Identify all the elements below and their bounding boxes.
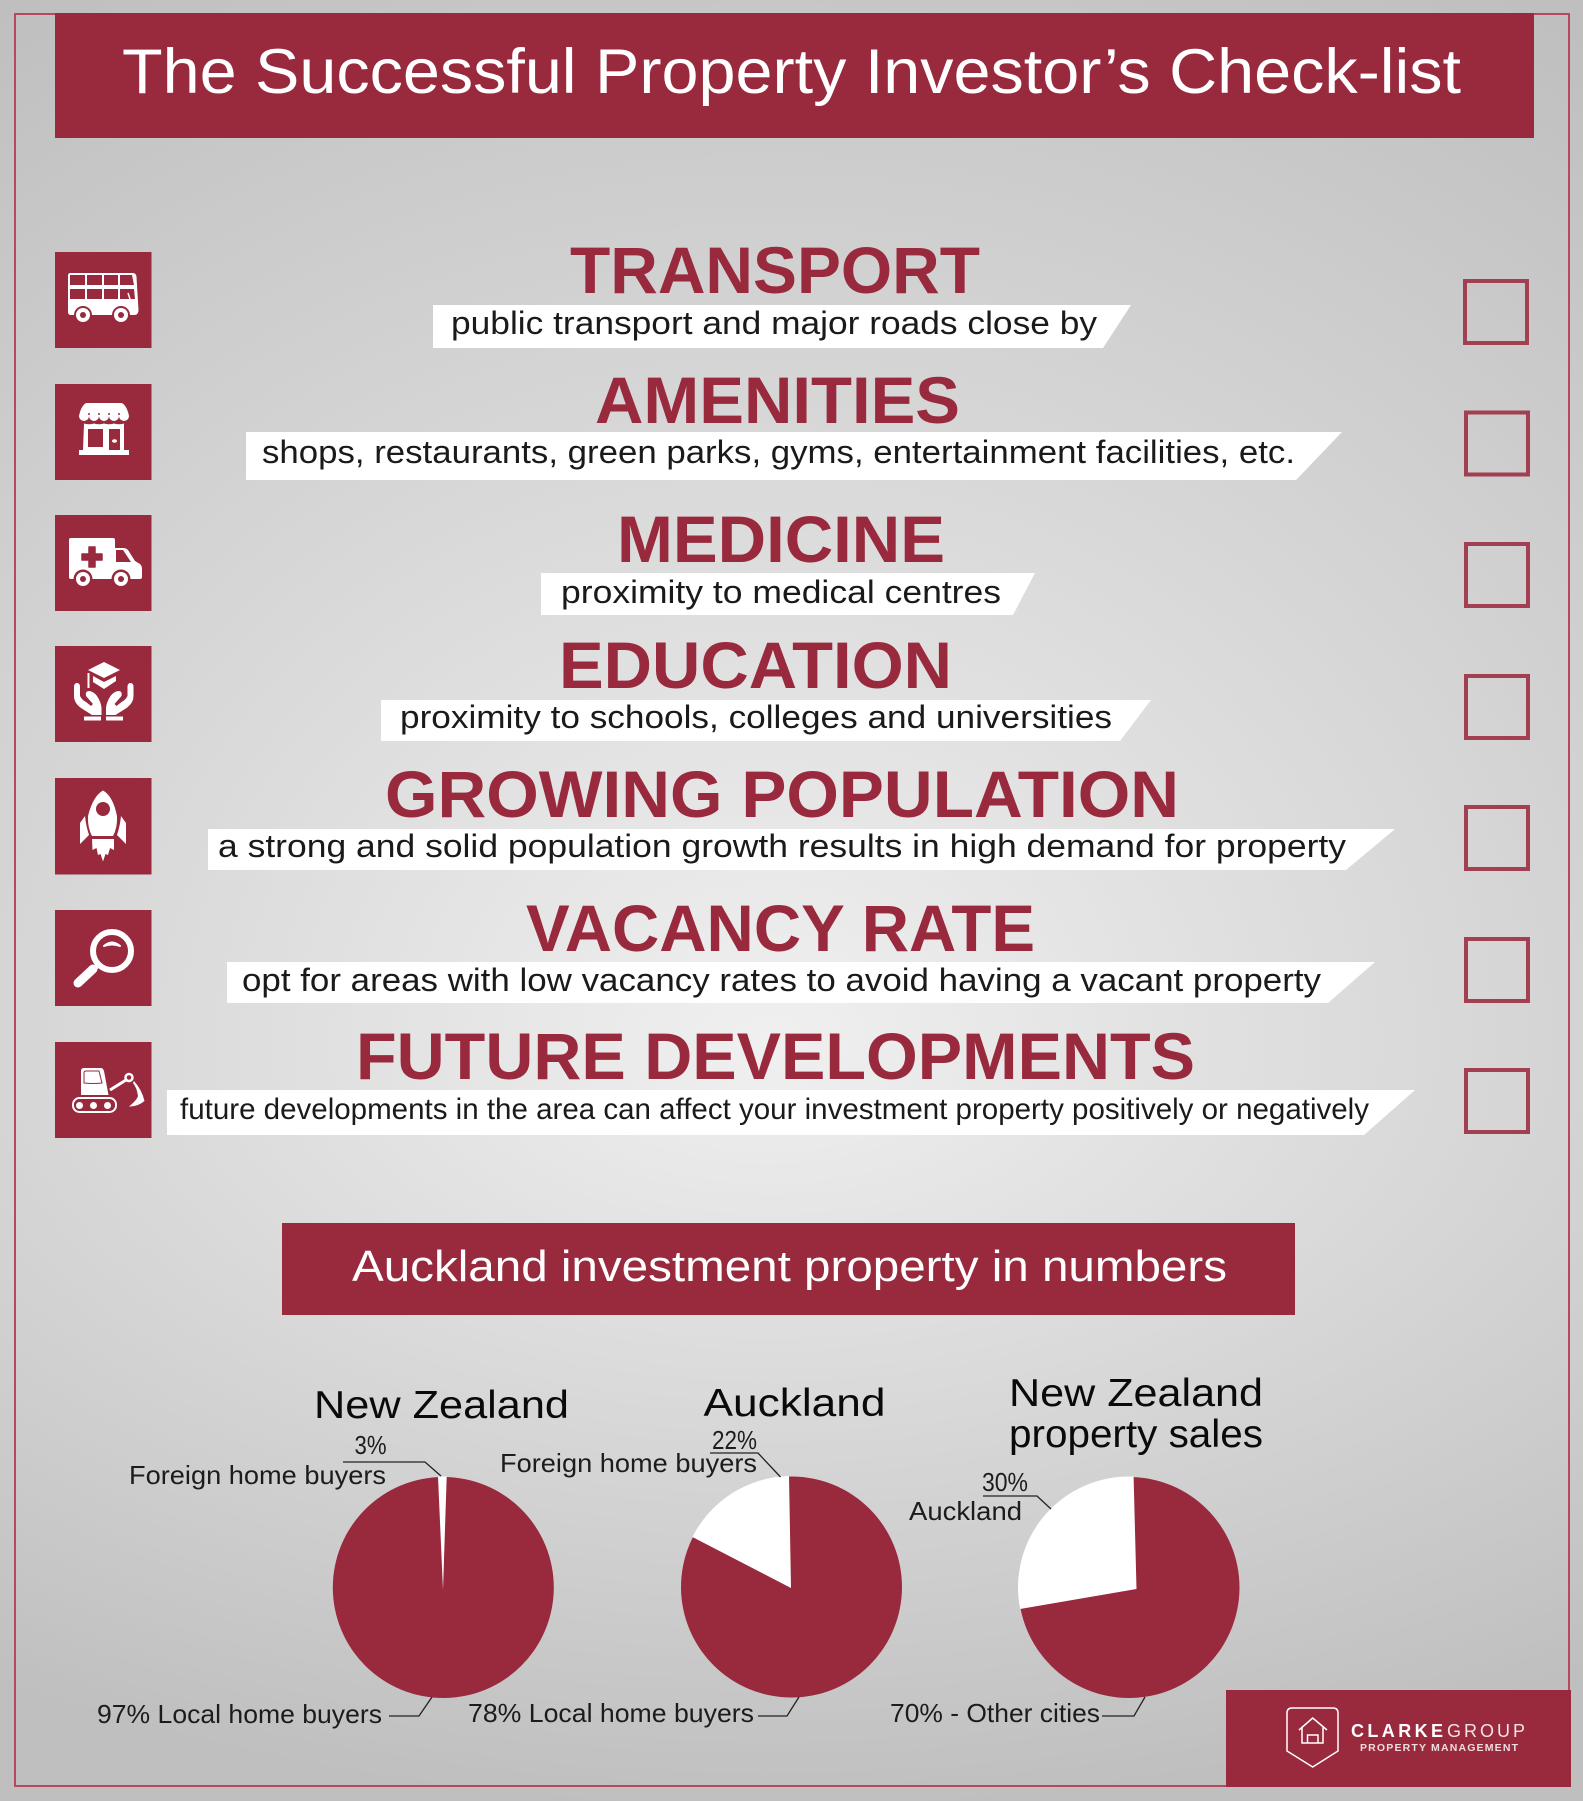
heading: EDUCATION <box>559 628 952 702</box>
logo wordmark: CLARKE <box>1351 1721 1443 1741</box>
heading: GROWING POPULATION <box>385 757 1179 831</box>
icon: magnifier <box>55 910 152 1006</box>
logo tagline: PROPERTY MANAGEMENT <box>1360 1742 1519 1754</box>
description: public transport and major roads close by <box>451 305 1097 341</box>
leader line <box>758 1697 799 1716</box>
icon: hands holding graduation cap <box>55 646 152 742</box>
label: local buyers: 78% Local home buyers <box>468 1698 754 1728</box>
description: a strong and solid population growth results in high demand for property <box>218 828 1346 864</box>
leader line <box>389 1697 432 1716</box>
row: growing population <box>55 757 1528 874</box>
leader line <box>983 1496 1051 1509</box>
leader line <box>1102 1697 1145 1716</box>
ribbon <box>433 305 1131 348</box>
label: 22 percent: 22% <box>712 1425 757 1455</box>
description: proximity to schools, colleges and universities <box>400 699 1112 735</box>
checkbox <box>1466 807 1528 869</box>
icon: shop <box>55 384 152 480</box>
ribbon <box>167 1090 1415 1135</box>
section banner <box>282 1223 1295 1315</box>
chart: New Zealand property sales pie <box>890 1372 1263 1728</box>
icon: bus <box>55 252 152 348</box>
checkbox <box>1466 1070 1528 1132</box>
row: transport <box>55 233 1527 348</box>
chart: New Zealand foreign buyers pie <box>97 1384 569 1729</box>
label: Auckland: Auckland <box>909 1496 1022 1526</box>
ribbon <box>381 700 1151 741</box>
heading: VACANCY RATE <box>526 891 1035 965</box>
checkbox <box>1465 281 1527 343</box>
label: 3 percent: 3% <box>354 1430 386 1460</box>
logo wordmark second part: GROUP <box>1447 1721 1525 1741</box>
row: amenities <box>55 363 1528 480</box>
logo panel <box>1226 1690 1571 1787</box>
leader line <box>710 1453 780 1477</box>
pie <box>333 1477 554 1698</box>
description: proximity to medical centres <box>561 574 1001 610</box>
checkbox <box>1466 412 1528 474</box>
row: future developments <box>55 1019 1528 1138</box>
chart title second line: property sales <box>1009 1413 1263 1456</box>
logo icon: house shield <box>1287 1708 1338 1767</box>
icon: ambulance <box>55 515 152 611</box>
checkbox <box>1466 939 1528 1001</box>
ribbon <box>246 432 1342 480</box>
title: The Successful Property Investor’s Check-list <box>122 37 1462 107</box>
checkbox <box>1466 544 1528 606</box>
row: medicine <box>55 502 1528 615</box>
chart title: Auckland <box>704 1382 886 1425</box>
label: local buyers: 97% Local home buyers <box>97 1699 382 1729</box>
pie <box>681 1476 902 1698</box>
label: 30 percent: 30% <box>982 1467 1028 1497</box>
icon: rocket <box>55 778 152 874</box>
icon: excavator <box>55 1042 152 1138</box>
pie <box>1018 1477 1240 1698</box>
row: education <box>55 628 1528 742</box>
checkbox <box>1466 676 1528 738</box>
ribbon <box>227 962 1375 1003</box>
label: other cities: 70% - Other cities <box>890 1698 1100 1728</box>
description: opt for areas with low vacancy rates to avoid having a vacant property <box>242 962 1321 998</box>
label: foreign buyers: Foreign home buyers <box>129 1460 386 1490</box>
chart title: New Zealand <box>314 1384 569 1427</box>
heading: MEDICINE <box>617 502 945 576</box>
label: foreign buyers: Foreign home buyers <box>500 1448 757 1478</box>
chart: Auckland foreign buyers pie <box>468 1382 902 1728</box>
heading: FUTURE DEVELOPMENTS <box>356 1019 1195 1093</box>
heading: TRANSPORT <box>570 233 980 307</box>
section heading: Auckland investment property in numbers <box>352 1242 1227 1291</box>
description: shops, restaurants, green parks, gyms, entertainment facilities, etc. <box>262 434 1295 470</box>
chart title: New Zealand <box>1009 1372 1263 1415</box>
title banner <box>55 13 1534 138</box>
ribbon <box>208 829 1395 870</box>
description: future developments in the area can affect your investment property positively or negatively <box>180 1093 1369 1126</box>
leader line <box>343 1462 441 1476</box>
heading: AMENITIES <box>595 363 960 437</box>
ribbon <box>541 573 1035 615</box>
row: vacancy rate <box>55 891 1528 1006</box>
